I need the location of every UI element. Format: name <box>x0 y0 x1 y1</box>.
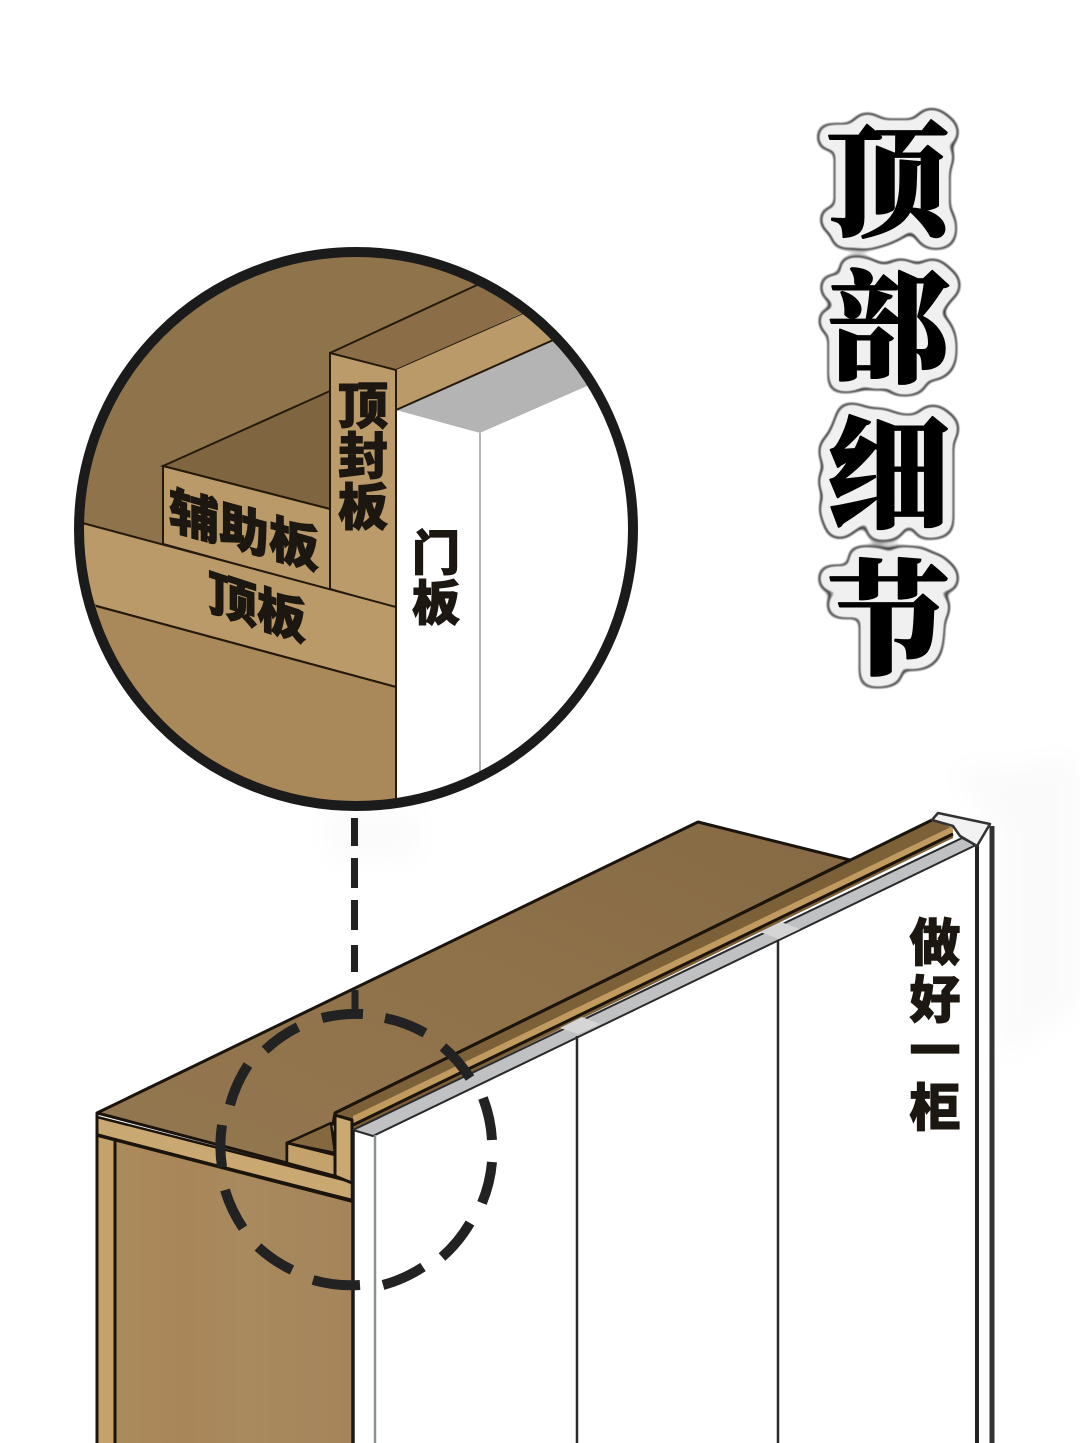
auxiliary board <box>287 1123 335 1176</box>
door white <box>468 386 587 433</box>
door top edge <box>353 838 976 1136</box>
door right end cap <box>932 813 990 846</box>
magnified wood construction <box>84 257 588 801</box>
label: 顶封板 <box>338 379 388 536</box>
dashed detail circle <box>220 1014 492 1285</box>
auxiliary front <box>163 466 330 590</box>
title: 细 <box>827 410 949 545</box>
sealing board edge band <box>397 314 552 408</box>
back top plane <box>84 257 476 544</box>
door highlights <box>560 922 800 1034</box>
panel: cabinet illustration <box>97 813 992 1443</box>
connector dashed line <box>351 818 358 1014</box>
panel: magnified detail circle <box>60 240 650 820</box>
cabinet side panel <box>97 1113 352 1443</box>
top board band <box>60 517 396 687</box>
label: 做好一柜: 好 <box>909 972 961 1029</box>
label: 门板: 门 <box>412 528 460 581</box>
label: 顶封板: 封 <box>338 429 388 485</box>
door grey top <box>398 341 588 433</box>
door lines <box>353 826 992 1443</box>
label: 顶封板: 板 <box>338 480 388 536</box>
label: 做好一柜: 一 <box>909 1023 961 1080</box>
auxiliary top face <box>163 391 330 509</box>
title: 部 <box>827 264 949 399</box>
top sealing strip <box>335 820 953 1183</box>
lower side <box>95 606 395 801</box>
label: 做好一柜: 柜 <box>909 1080 961 1137</box>
sealing board top face <box>332 286 522 369</box>
label: 做好一柜 <box>909 915 961 1137</box>
label: 门板 <box>412 528 460 631</box>
sealing board front <box>330 353 396 608</box>
label: 做好一柜: 做 <box>909 915 961 972</box>
title: 节 <box>827 556 949 691</box>
cabinet top surface <box>97 822 850 1163</box>
title <box>827 118 956 691</box>
label: 门板: 板 <box>412 578 460 631</box>
label: 辅助板: 辅助板 <box>169 482 319 580</box>
label: 顶板: 顶板 <box>208 564 306 652</box>
label: 顶封板: 顶 <box>338 379 388 435</box>
title: 顶 <box>827 118 956 253</box>
circle outline <box>79 252 633 806</box>
